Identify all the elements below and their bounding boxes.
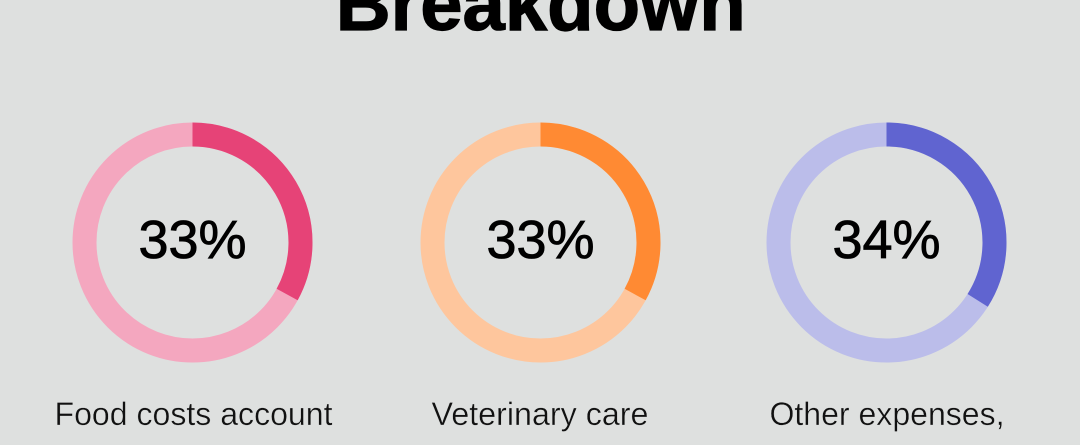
donut chart: veterinary 33%: [432, 134, 648, 350]
panel: other expenses: [770, 134, 1004, 432]
value: 33%: 33%: [486, 210, 595, 270]
value: 33%: 33%: [138, 210, 247, 270]
donut chart: other 34%: [778, 134, 995, 350]
value: 34%: 34%: [832, 210, 941, 270]
panel: food costs: [54, 134, 333, 432]
label: other expenses: Other expenses,: [770, 396, 1004, 432]
panel: veterinary care: [432, 134, 648, 432]
label: veterinary care: Veterinary care: [432, 396, 648, 432]
donut chart: food 33%: [84, 134, 300, 350]
label: food costs: Food costs account: [54, 396, 333, 432]
